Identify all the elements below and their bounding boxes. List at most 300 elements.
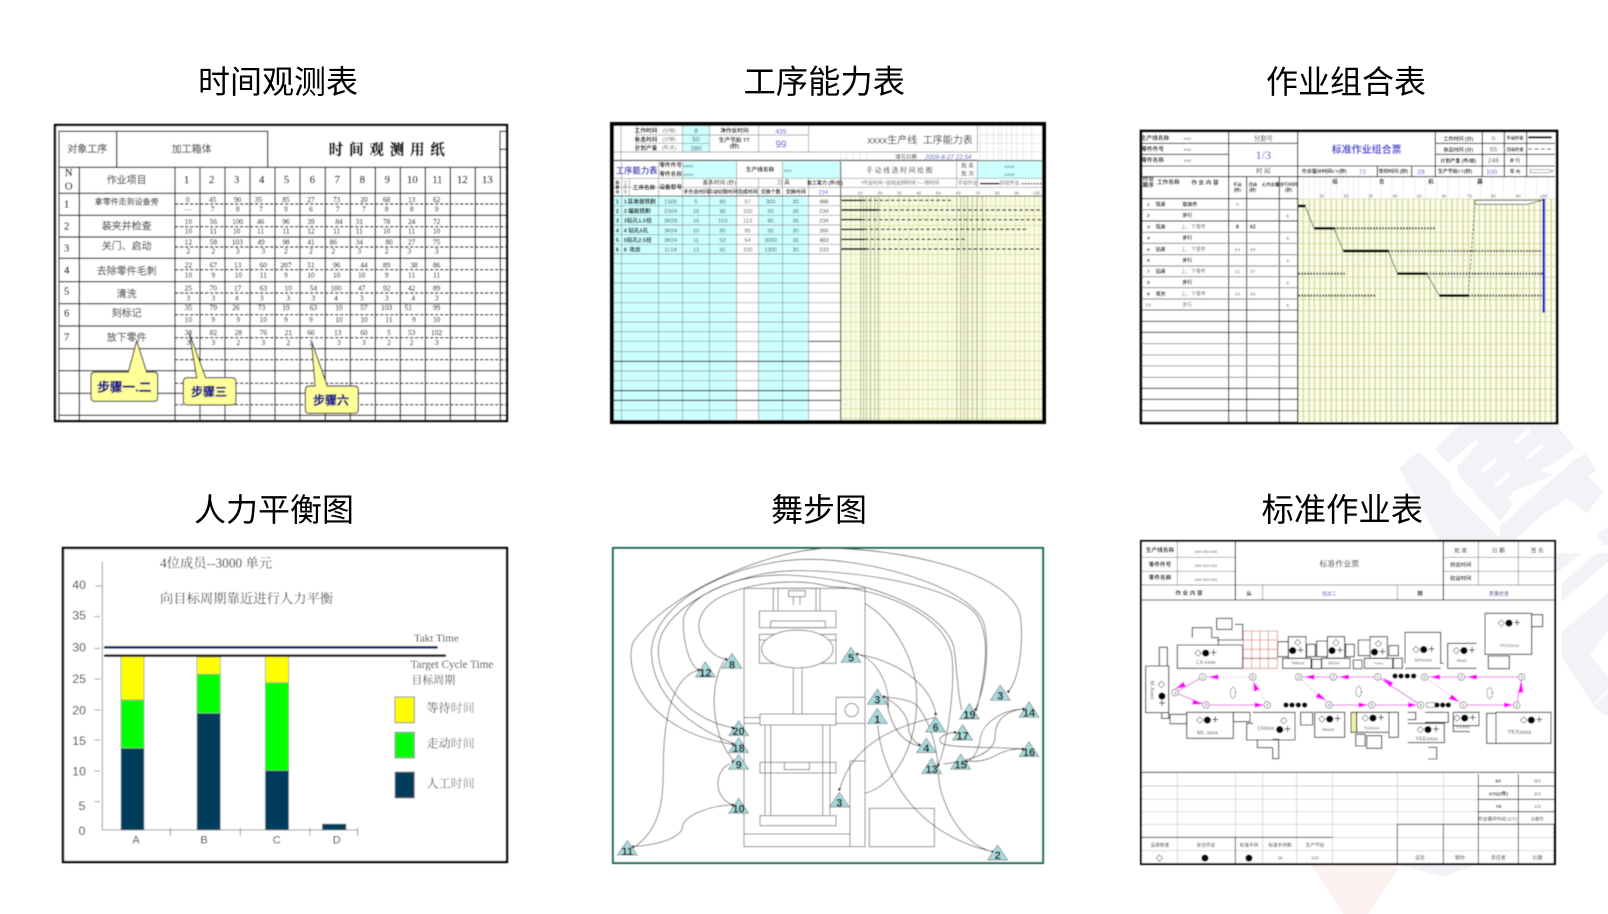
timing readings: 3 (211, 294, 215, 303)
timing readings: 19 (282, 303, 290, 312)
timing readings: 46 (257, 217, 265, 226)
column headers: 号 (623, 188, 627, 194)
sequence step nodes (1172, 674, 1525, 708)
machine symbols and labels: ◇ (1280, 715, 1288, 726)
timing readings: 62 (433, 195, 441, 204)
timing readings: 10 (185, 226, 192, 235)
sheet header text: 批 次 (961, 170, 974, 178)
timing readings: 3 (286, 294, 290, 303)
timing readings: 44 (360, 261, 368, 270)
y axis labels: 40 (72, 578, 86, 592)
timing readings: 4 (235, 294, 239, 303)
step node numbers: 2 (1174, 690, 1177, 695)
sheet header text: 8 (360, 175, 365, 186)
column headers: 机 (615, 179, 619, 185)
sheet header text: 等 内 (1510, 168, 1521, 175)
step node numbers: 2 (1332, 675, 1335, 680)
column headers: *作业时间 *自动运转时间 *—待时间 (861, 180, 939, 187)
sheet header text: 零件件号 (659, 161, 682, 169)
timing readings: 3 (362, 338, 366, 347)
process rows: 2 (624, 209, 627, 215)
timing readings: 9 (385, 270, 389, 279)
sheet header text: 加工箱体 (172, 143, 212, 156)
timing readings: 3 (435, 338, 439, 347)
work rows: 步行 (1182, 234, 1192, 241)
timing readings: 9 (211, 270, 215, 279)
process rows: 300 (766, 199, 775, 205)
timing readings: 21 (285, 328, 292, 337)
column headers: 设备型号 (659, 183, 682, 191)
numbered step markers: 14 (1023, 708, 1036, 720)
sheet header text: 休息时间 (635, 135, 658, 143)
numbered step markers: 8 (729, 659, 735, 671)
timing readings: 9 (435, 204, 439, 213)
bottom legend text: ● (1201, 853, 1209, 864)
timing readings: 8 (236, 204, 240, 213)
timing readings: 10 (185, 315, 192, 324)
sheet header text: 工序能力表 (616, 165, 658, 175)
machine symbols and labels: ●+ (1370, 647, 1386, 658)
work item rows: 7 (64, 332, 70, 343)
column headers: 步行时间 (1280, 181, 1298, 188)
timing readings: 86 (330, 238, 337, 247)
timing readings: 78 (383, 217, 391, 226)
timing readings: 98 (282, 238, 290, 247)
timing readings: 3 (309, 338, 313, 347)
process rows: 5 (694, 199, 698, 205)
numbered step markers: 11 (622, 846, 633, 858)
sheet header text: 72 (1359, 169, 1366, 176)
column headers: 手作业时间 (684, 188, 708, 195)
timing readings: 2 (211, 247, 215, 256)
machine symbols and labels: YEExxxx (1415, 737, 1438, 743)
timing readings: 17 (234, 284, 242, 293)
work rows: 上、下零件 (1181, 224, 1206, 231)
step node numbers: 5 (1370, 703, 1373, 708)
numbered step markers: 3 (874, 695, 880, 707)
timing readings: 11 (210, 226, 217, 235)
timing readings: 24 (408, 217, 416, 226)
process rows: 3K04 (664, 228, 677, 234)
work rows: 上、下零件 (1181, 268, 1206, 275)
process rows: 30 (793, 199, 799, 205)
timing readings: 79 (210, 303, 217, 312)
timing readings: 39 (307, 217, 315, 226)
sheet header text (65, 140, 493, 192)
timing readings: 3 (311, 294, 315, 303)
timing readings: 35 (255, 195, 262, 204)
process rows: 6 (616, 248, 619, 254)
machine symbols and labels: ◇●+ (1520, 714, 1543, 725)
numbered step markers: 2 (995, 850, 1001, 862)
legend (395, 697, 475, 798)
chart heading text: 向目标周期靠近进行人力平衡 (160, 590, 333, 606)
sheet header text: xxx (784, 168, 792, 174)
column headers: 作业 (1143, 175, 1154, 183)
y axis labels: 35 (72, 609, 86, 623)
work rows (1146, 201, 1289, 309)
sheet header text: 分割号 (1254, 133, 1273, 142)
work rows: 14 (1235, 247, 1240, 253)
gantt bars (842, 200, 1042, 249)
sheet header text: 作 业 内 容 (1175, 589, 1203, 597)
process rows: 1 (616, 199, 619, 205)
bottom legend text: 品质检查 (1151, 841, 1170, 848)
numbered step markers: 18 (733, 743, 745, 755)
bottom legend text: 日期 (1532, 856, 1542, 862)
revision table text: 370(2件) (1489, 790, 1508, 797)
takt and target lines (104, 647, 446, 656)
timing readings: — (183, 204, 192, 213)
work rows: 步行 (1182, 212, 1192, 219)
timing readings: 7 (336, 204, 340, 213)
sheet header text: 435 (775, 128, 787, 135)
panel: standard work sheet (1141, 541, 1555, 864)
panel: workforce balance chart (63, 548, 507, 862)
machine symbols and labels: ◇●+ (1194, 647, 1218, 658)
machine symbols and labels: ◇ (1375, 638, 1383, 649)
timing readings: 73 (258, 303, 266, 312)
timing readings: 22 (185, 261, 192, 270)
timing readings: 2 (331, 247, 335, 256)
callout: 步骤一二 (91, 341, 158, 401)
timing readings: 11 (433, 270, 441, 279)
sheet header text: 计划产量 (件/班) (1440, 157, 1477, 164)
timing readings: 2 (385, 247, 389, 256)
timing readings: 7 (259, 204, 263, 213)
bottom legend text: 制作 (1455, 855, 1465, 862)
work rows: 4 (1286, 258, 1289, 264)
timing readings: 11 (385, 315, 393, 324)
numbered step markers: 12 (699, 667, 711, 679)
work item rows: 1 (64, 199, 69, 210)
timing readings: 10 (433, 226, 441, 235)
timing readings: 9 (284, 270, 288, 279)
column headers: 234 (819, 190, 828, 196)
route arrowheads (1175, 674, 1523, 708)
chart heading text: 4位成员--3000 单元 (160, 555, 272, 571)
timing readings: 10 (233, 226, 241, 235)
chart axes (94, 562, 358, 836)
revision table text: 2/3 (1534, 791, 1541, 797)
timing readings: 13 (408, 195, 416, 204)
column headers: 40 (916, 191, 922, 196)
sheet header text: xxx-xxx-xxx (1195, 563, 1218, 568)
timing readings: 10 (383, 226, 391, 235)
machine symbols and labels: ●+ (1276, 724, 1292, 735)
x axis labels (132, 835, 341, 847)
sheet header text: 批 名 (961, 161, 974, 169)
column headers: 自动切削时间 (708, 188, 738, 195)
timing readings: 96 (333, 261, 341, 270)
process rows: 11 (693, 238, 699, 244)
sheet header text: xxx (1184, 136, 1192, 142)
title: 舞步图: 舞步图 (771, 492, 867, 528)
work rows: 24 (1250, 247, 1256, 253)
machine symbols and labels: ◇●+ (1498, 617, 1521, 628)
timing readings: 72 (433, 217, 441, 226)
callout: 步骤六: 步骤六 (313, 392, 349, 407)
timing readings: 10 (185, 217, 192, 226)
step node numbers: 3 (1205, 703, 1208, 708)
timing readings: 41 (307, 238, 315, 247)
title: 作业组合表: 作业组合表 (1266, 64, 1426, 100)
numbered step markers: 6 (933, 722, 939, 734)
timing readings: 26 (232, 303, 240, 312)
numbered step markers: 20 (733, 726, 745, 738)
legend: 等待时间 (427, 700, 475, 715)
timing readings: 10 (335, 303, 343, 312)
timing readings: 89 (433, 284, 441, 293)
sheet header text: 作业项目 (107, 174, 147, 186)
sheet header text: 2 (209, 175, 214, 186)
machine symbols and labels: Mxxx (1328, 660, 1340, 666)
sheet header text: 时 间 (1256, 166, 1271, 175)
panel: standard work combination sheet (1141, 131, 1557, 423)
route arrow dots (632, 653, 1025, 853)
step node numbers: 4 (1460, 675, 1463, 680)
sheet header text: 生产节拍TT(秒) (1438, 168, 1472, 175)
timing readings: 90 (234, 195, 242, 204)
timing readings: 70 (210, 284, 217, 293)
work rows: 铣床 (1156, 201, 1166, 208)
sheet header text: N (65, 168, 73, 179)
timing readings: 9 (211, 315, 215, 324)
column headers: 心作业量 (1262, 181, 1280, 188)
timing readings: 12 (185, 238, 192, 247)
machine symbols and labels: YXxxx (1456, 725, 1470, 731)
sheet header text: 生产线名称 (1146, 546, 1174, 554)
timing readings: 10 (433, 315, 441, 324)
timing readings: 27 (408, 238, 416, 247)
timing readings: 8 (410, 204, 414, 213)
column headers: 合 (1379, 177, 1385, 185)
line labels (411, 633, 493, 686)
work item rows (64, 197, 159, 344)
process rows: 53 (720, 238, 726, 244)
timing readings: 54 (310, 284, 317, 293)
work item rows: 5 (64, 286, 69, 297)
machine symbols and labels: ◇●+ (1453, 645, 1476, 656)
machine drawing (744, 588, 934, 847)
sheet header text: 生产线名称 (1141, 134, 1169, 142)
x axis labels: C (273, 835, 281, 847)
column headers: 组 (1332, 177, 1338, 185)
bottom legend text: ● (1245, 853, 1253, 864)
timing readings: 92 (383, 284, 391, 293)
work item rows: 刻标记 (112, 306, 142, 319)
column headers: 工 (623, 180, 627, 185)
sheet header text: 净作业时间 (720, 127, 749, 135)
sheet header text: 3 (234, 175, 239, 186)
step node numbers: 3 (1297, 675, 1300, 680)
timing readings: 86 (433, 261, 441, 270)
sheet header text: 10 (407, 175, 418, 186)
process rows: 基准面铣削 (628, 197, 656, 205)
column headers: 手动作业 (958, 180, 978, 187)
revision table text: 78 (1496, 804, 1501, 810)
timing readings: 10 (360, 315, 368, 324)
sheet header text: 手 动 线 选 时 间 绘 图 (866, 165, 933, 174)
numbered step markers: 15 (955, 759, 967, 771)
column headers: 序 (623, 184, 627, 190)
column headers: 80 (1491, 193, 1496, 198)
numbered step markers (617, 647, 1039, 862)
callout: 步骤三 (183, 333, 236, 405)
work rows: 10 (1146, 303, 1151, 309)
sheet header text: xxxx (1004, 172, 1015, 178)
timing readings: 100 (330, 284, 342, 293)
timing readings: 3 (407, 247, 411, 256)
sheet header text: 标准作业票 (1319, 559, 1359, 569)
timing readings: 3 (357, 247, 361, 256)
sheet header text: (秒) (730, 142, 739, 150)
timing readings: 89 (383, 261, 391, 270)
process rows: 5 (616, 238, 619, 244)
sheet header text: 批 准 (1454, 546, 1467, 554)
process rows: 6 (624, 248, 627, 254)
timing readings: 27 (307, 195, 315, 204)
revision table text: 3/3 (1534, 778, 1541, 784)
process rows: 95 (745, 228, 751, 234)
timing readings: 51 (307, 261, 315, 270)
process rows: 30 (793, 248, 799, 254)
column headers: 60 (956, 191, 961, 196)
machine symbols and labels (1149, 617, 1543, 743)
work item rows: 放下零件 (107, 331, 147, 344)
process rows: 486 (819, 199, 829, 205)
process rows: 钻孔5孔 (628, 226, 649, 234)
background watermark: upper lavender logo (1399, 425, 1608, 553)
bottom legend text: 标准手持 (1240, 841, 1259, 848)
column headers: 基本时间 (秒) (703, 179, 736, 187)
sheet header text: 验证时间 (1450, 574, 1471, 582)
numbered step markers: 1 (874, 714, 880, 726)
process rows: 30 (793, 219, 799, 225)
process rows: 100 (743, 209, 752, 215)
column headers: 70 (1467, 193, 1472, 198)
column headers: 90 (1516, 193, 1521, 198)
column headers: 器 (1477, 178, 1483, 185)
timing readings: 12 (307, 226, 315, 235)
process rows: 30 (793, 228, 799, 234)
process rows: 50 (768, 209, 774, 215)
work rows: 6 (1286, 280, 1289, 286)
machine symbols and labels: ◇●+ (1196, 715, 1219, 726)
timing readings: 9 (236, 315, 240, 324)
work rows: 铣床 (1156, 224, 1166, 231)
timing readings (183, 195, 442, 347)
process rows: 1S05 (664, 199, 677, 205)
work rows: 3 (1147, 225, 1150, 231)
machine symbols and labels: Mxxxx (1322, 727, 1335, 732)
timing readings: 99 (433, 303, 441, 312)
x axis labels: B (200, 835, 208, 847)
sheet header text: 0 (1491, 136, 1495, 143)
work item rows: 关门、启动 (102, 240, 152, 253)
work rows: 8 (1236, 225, 1239, 231)
callout: 步骤一二: 步骤一.二 (97, 379, 151, 394)
sheet header text: 零件名称 (659, 170, 682, 178)
work item rows: 清洗 (117, 288, 137, 301)
column headers: 自动 (1248, 181, 1258, 188)
process rows: 1L04 (664, 248, 677, 254)
sheet header text: 零件件号 (1149, 560, 1172, 568)
y axis labels: 30 (72, 641, 86, 655)
numbered step markers: 19 (963, 709, 975, 721)
machine symbols and labels: Tyxxxx (1364, 725, 1380, 731)
timing readings: 3 (385, 294, 389, 303)
work item rows: 去除零件毛刺 (97, 264, 157, 277)
machine symbols and labels: YKXxxxx (1507, 730, 1531, 736)
work rows: 12 (1235, 292, 1240, 298)
legend: 人工时间 (427, 775, 475, 790)
title: 时间观测表: 时间观测表 (198, 64, 358, 100)
machine symbols and labels: ML.xxxx (1197, 731, 1218, 737)
timing readings: 7 (362, 204, 366, 213)
walking route curves (631, 548, 1023, 852)
timing readings: 9 (284, 204, 288, 213)
timing readings: 6 (309, 204, 313, 213)
bottom legend text: 安全作业 (1197, 841, 1216, 848)
step node numbers: 4 (1328, 703, 1331, 708)
timing readings: 51 (405, 303, 412, 312)
timing readings: 84 (335, 217, 343, 226)
work item rows: 3 (64, 243, 69, 254)
process rows: 100 (743, 248, 752, 254)
sheet header text: 工作时间 (分) (1444, 135, 1473, 142)
revision table text: 作业循环时间 (CT) (1478, 816, 1517, 823)
sheet header text: 9 (385, 175, 390, 186)
column headers: 10 (1319, 193, 1325, 198)
column headers: 30 (1368, 193, 1374, 198)
revision table text: 52 (1496, 778, 1501, 784)
sheet header text: 等待时间 (秒) (1379, 168, 1408, 175)
panel: time observation sheet (55, 125, 507, 421)
machine symbols and labels: MXxxxx (1415, 657, 1433, 663)
timing readings: 58 (210, 238, 217, 247)
machine symbols and labels: *Mxxx (1291, 660, 1305, 666)
sheet header text: (件/天) (662, 145, 677, 152)
timing readings: 11 (282, 226, 290, 235)
work rows: 7 (1147, 269, 1150, 275)
work rows: 2 (1147, 213, 1150, 219)
sheet header text: xxxx生产线 工序能力表 (867, 133, 973, 146)
bottom legend text (1151, 841, 1542, 864)
sheet header text (616, 127, 1015, 178)
timing readings: 10 (333, 270, 341, 279)
timing readings: 5 (387, 328, 391, 337)
timing readings: 9 (309, 315, 313, 324)
machine symbols and labels: ●+ (1328, 645, 1344, 656)
timing readings: 53 (408, 328, 416, 337)
timing readings: 34 (356, 238, 363, 247)
timing readings: 42 (408, 284, 416, 293)
timing readings: 102 (431, 328, 442, 337)
machine symbols and labels: LX-xxxx (1197, 660, 1216, 666)
process rows: 12 (693, 248, 699, 254)
timing readings: 38 (410, 261, 418, 270)
machine symbols and labels: *xxxx (1374, 660, 1383, 665)
timing readings: 8 (385, 204, 389, 213)
process rows: 端面铣削 (628, 207, 651, 215)
column headers: 10 (858, 191, 863, 196)
bottom legend text: 生产节拍 (1306, 841, 1325, 848)
step node numbers: 2 (1515, 703, 1518, 708)
timing readings: 63 (260, 284, 267, 293)
machine symbols and labels: + (1158, 698, 1166, 709)
column headers: 工作名称 (1157, 178, 1180, 186)
